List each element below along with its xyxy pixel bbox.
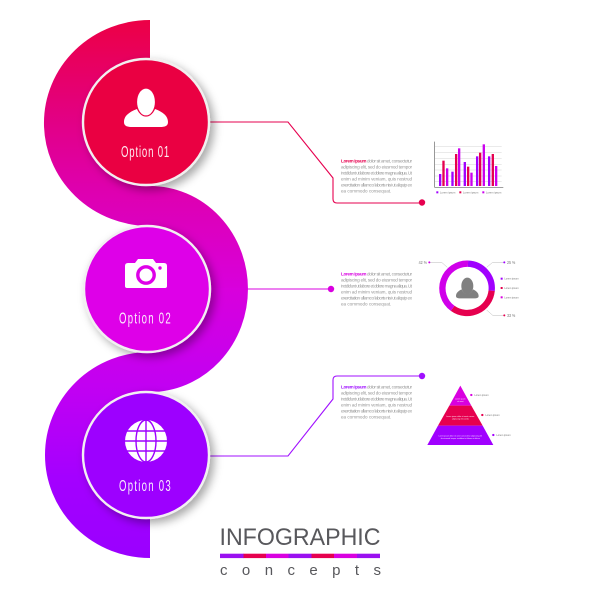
pyramid tiny text: do eiusmod tempor incididunt ut labore et dolore (441, 437, 480, 440)
text block: option 01: Lorem ipsum dolor sit amet, consectetur (341, 158, 412, 164)
label: option 03: Option 03 (119, 476, 172, 495)
text block: option 03: Lorem ipsum dolor sit amet, consectetur (341, 384, 412, 390)
text block: option 03 (341, 384, 413, 420)
donut chart: 33 % (507, 313, 516, 319)
connector: option 01 (209, 122, 425, 206)
icon: globe (125, 420, 167, 462)
text block: option 03: enim ad minim veniam, quis nostrud (341, 402, 412, 408)
text block: option 02: Lorem ipsum dolor sit amet, consectetur (341, 272, 412, 276)
text block: option 03: adipiscing elit, sed do eiusmod tempor (341, 390, 412, 396)
pyramid chart (427, 386, 511, 445)
pyramid legend: Lorem ipsum (474, 394, 489, 397)
pyramid legend: Lorem ipsum (496, 434, 511, 437)
subtitle: concepts (220, 562, 381, 579)
bar chart (435, 142, 503, 194)
pyramid tiny text (439, 398, 483, 440)
text block: option 01: incididunt ut labore et dolore magna aliqua. Ut (341, 170, 413, 176)
donut legend: Lorem ipsum (504, 287, 519, 290)
text block: option 03: incididunt ut labore et dolore magna aliqua. Ut (341, 396, 413, 402)
chart legend: Lorem ipsum (463, 190, 479, 194)
donut legend: Lorem ipsum (504, 278, 519, 281)
donut legend: Lorem ipsum (504, 296, 519, 299)
title colour bar (220, 554, 380, 558)
donut chart (419, 260, 519, 319)
label: option 02: Option 02 (119, 309, 172, 327)
donut callouts (430, 262, 504, 315)
panel: option 02 circle (84, 226, 210, 352)
text block: option 02: incididunt ut labore et dolore magna aliqua. Ut (341, 284, 413, 288)
text block: option 02: ea commodo consequat. (341, 302, 391, 306)
pyramid tiny text: Lorem ipsum dolor sit amet consectetur adipiscing elit (439, 434, 483, 437)
pyramid tiny text: Lorem ipsum dolor sit amet consec (446, 415, 475, 418)
text block: option 02: enim ad minim veniam, quis nostrud (341, 290, 412, 294)
text block: option 02: exercitation ullamco laboris nisi ut aliquip ex (341, 296, 413, 300)
icon: camera (125, 259, 167, 288)
title: INFOGRAPHIC (220, 524, 380, 551)
icon: person in donut (456, 278, 479, 298)
text block: option 02 (341, 272, 413, 306)
icon: person (124, 88, 168, 127)
pyramid legend (470, 394, 511, 437)
connector: option 03 (209, 373, 425, 456)
pyramid tiny text: adipiscing elit sed do (452, 418, 469, 421)
text block: option 01: enim ad minim veniam, quis nostrud (341, 176, 412, 182)
text block: option 01 (341, 158, 413, 194)
S-curve ribbon (64, 40, 228, 538)
chart legend: Lorem ipsum (440, 190, 456, 194)
chart legend (436, 190, 502, 194)
pyramid tiny text: Lorem ipsum (455, 398, 466, 400)
panel: option 01 circle (83, 59, 209, 185)
chart legend: Lorem ipsum (486, 190, 502, 194)
title (220, 524, 381, 579)
panel: option 03 circle (83, 392, 209, 518)
pyramid legend: Lorem ipsum (485, 414, 500, 417)
donut chart: 42 % (419, 260, 427, 266)
donut chart: 25 % (507, 260, 516, 266)
label: option 01: Option 01 (121, 142, 170, 161)
text block: option 01: exercitation ullamco laboris nisi ut aliquip ex (341, 182, 413, 188)
text block: option 02: adipiscing elit, sed do eiusmod tempor (341, 278, 412, 282)
text block: option 01: adipiscing elit, sed do eiusmod tempor (341, 164, 412, 170)
connector: option 02 (209, 286, 334, 292)
text block: option 01: ea commodo consequat. (341, 188, 391, 194)
text block: option 03: exercitation ullamco laboris nisi ut aliquip ex (341, 408, 413, 414)
donut legend (501, 278, 519, 299)
pyramid tiny text: sit amet (457, 400, 464, 403)
text block: option 03: ea commodo consequat. (341, 414, 391, 420)
